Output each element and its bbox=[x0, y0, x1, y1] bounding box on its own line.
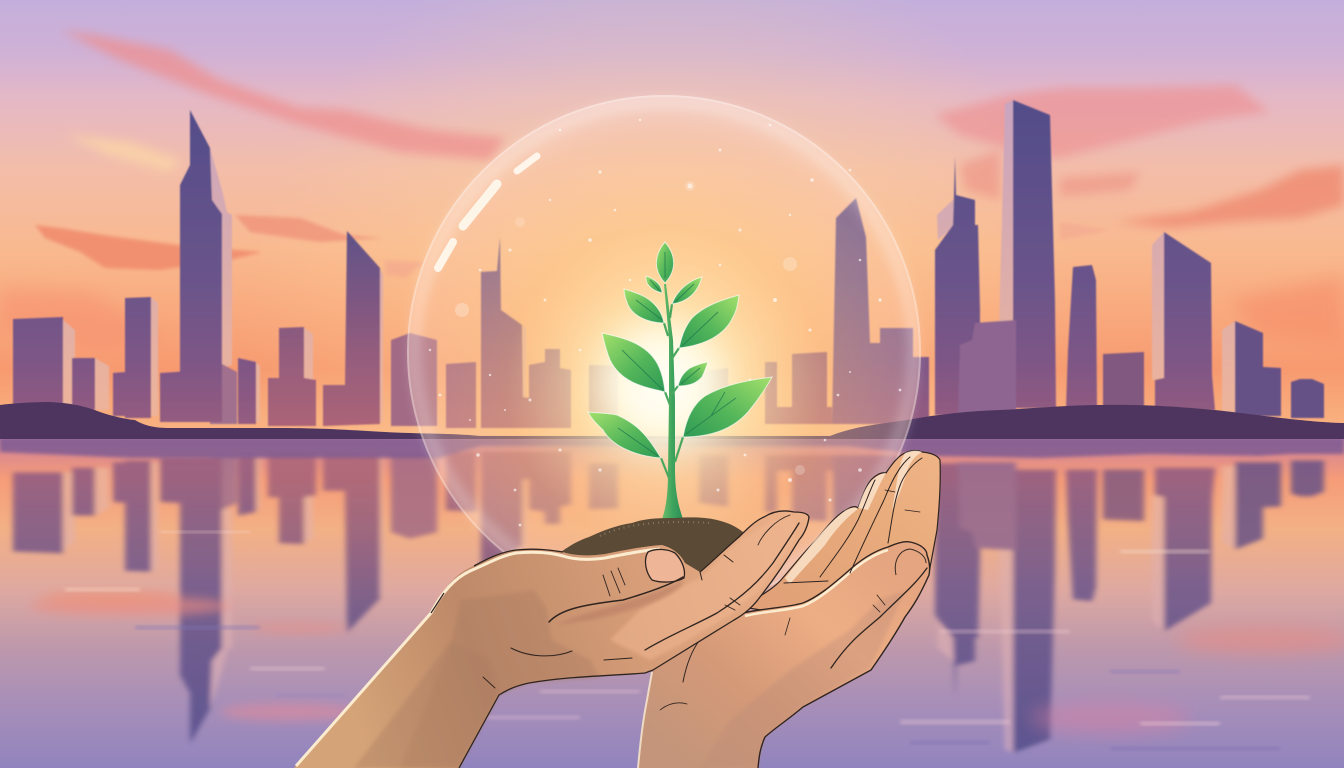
building reflections bbox=[13, 451, 1324, 753]
bubble highlights bbox=[438, 156, 537, 268]
left hand bbox=[294, 511, 809, 768]
clouds bbox=[0, 30, 1344, 350]
branch stalks bbox=[661, 304, 683, 478]
wrist shadow bbox=[354, 590, 600, 768]
finger highlights bbox=[785, 451, 922, 584]
thumb shadow bbox=[555, 580, 684, 625]
left thumb nail bbox=[645, 549, 685, 582]
plant bbox=[588, 242, 772, 519]
right hand lines bbox=[660, 457, 927, 710]
right fingers bbox=[743, 451, 940, 615]
finger warm tone bbox=[610, 518, 795, 660]
bubble rim glow bbox=[415, 103, 913, 601]
water shimmer patches bbox=[30, 531, 1344, 750]
right thumb nail bbox=[895, 549, 926, 575]
hand top highlight bbox=[296, 549, 660, 766]
reflection base band bbox=[0, 438, 1344, 458]
stem bbox=[662, 284, 683, 519]
left hand lines bbox=[483, 515, 799, 688]
sky background bbox=[0, 0, 1344, 445]
right hand outline bbox=[743, 542, 930, 768]
palm shadow bbox=[700, 590, 905, 768]
outer wrist shade bbox=[400, 640, 499, 768]
city skyline bbox=[13, 100, 1324, 428]
soil mound bbox=[561, 517, 743, 580]
warm horizon glow bbox=[245, 0, 1085, 445]
small wrist line bbox=[431, 593, 444, 613]
palm and thumb bbox=[638, 542, 930, 768]
palm edge highlight bbox=[745, 550, 888, 616]
leaf veins bbox=[618, 252, 736, 456]
leaves bbox=[588, 242, 772, 458]
right hand bbox=[638, 451, 940, 768]
soil speckle bbox=[600, 522, 712, 536]
glass bubble bbox=[407, 95, 921, 609]
left palm edge highlight bbox=[638, 672, 652, 768]
hand outline bbox=[459, 511, 809, 768]
water bbox=[0, 436, 1344, 768]
bubble sparkles bbox=[429, 119, 901, 526]
distant hills bbox=[0, 402, 1344, 439]
central sun glow bbox=[607, 330, 717, 440]
bubble glow bbox=[407, 95, 921, 609]
bubble rim bbox=[408, 96, 920, 608]
